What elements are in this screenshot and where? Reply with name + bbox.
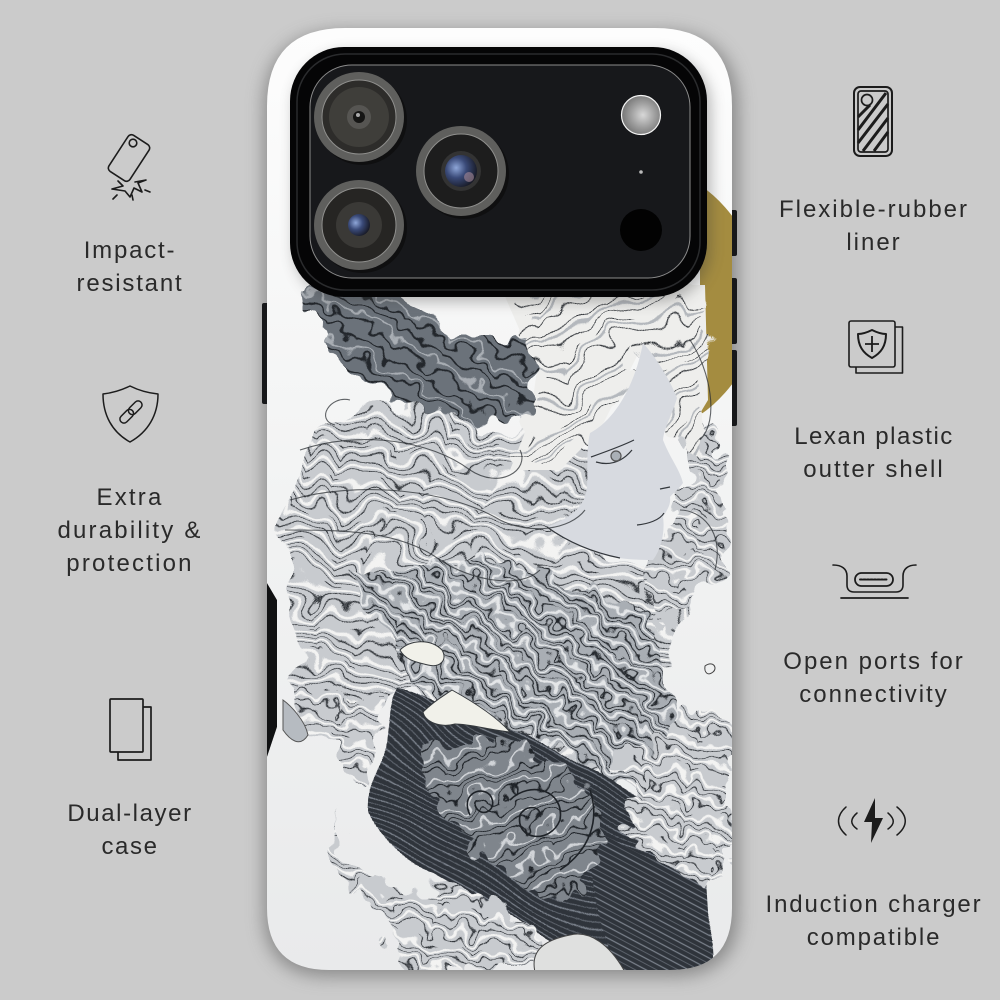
- camera island: [290, 47, 711, 302]
- gold circle: [700, 190, 732, 414]
- label: case: [101, 833, 159, 860]
- lower garland: [330, 810, 560, 970]
- lens: telephoto: [314, 180, 407, 273]
- label: durability &: [57, 517, 203, 544]
- lens: main: [416, 126, 509, 219]
- horn: [305, 285, 537, 421]
- side buttons: [262, 210, 737, 426]
- label: Impact-: [84, 237, 176, 264]
- label: [794, 423, 954, 483]
- microphone dot: [639, 170, 643, 174]
- right flower: [612, 708, 732, 885]
- label: Open ports for: [783, 648, 965, 675]
- icon: shield with link: [102, 385, 159, 443]
- label: outter shell: [803, 456, 945, 483]
- feature: extra durability: [57, 385, 203, 577]
- left garland: [300, 690, 385, 790]
- label: liner: [846, 229, 902, 256]
- left leaf: [283, 700, 308, 742]
- camera plate: [310, 65, 690, 278]
- icon: shield layers: [848, 320, 904, 374]
- label: Dual-layer: [67, 800, 193, 827]
- side cutout: [267, 583, 277, 757]
- face: [547, 343, 683, 560]
- sensor: [620, 209, 662, 251]
- flash: [622, 96, 660, 134]
- swirl linework: [467, 790, 594, 870]
- icon: two layers: [109, 698, 152, 761]
- icon: wireless charging bolt: [838, 798, 906, 843]
- upper hair: [510, 285, 712, 470]
- label: Lexan plastic: [794, 423, 954, 450]
- label: [766, 891, 982, 951]
- lens: ultra wide: [314, 72, 407, 165]
- icon: usb-c port: [832, 564, 917, 599]
- icon: striped liner: [853, 86, 893, 157]
- feature: induction charger: [766, 798, 982, 951]
- denser lower hair: [350, 560, 700, 790]
- feature: open ports: [783, 564, 965, 708]
- label: [77, 237, 183, 297]
- label: [67, 800, 193, 860]
- label: [779, 196, 969, 256]
- feature: lexan plastic shell: [794, 320, 954, 483]
- feature: flexible-rubber liner: [779, 86, 969, 256]
- feature: dual-layer case: [67, 698, 193, 860]
- ornamental swirls: [420, 740, 602, 905]
- label: protection: [66, 550, 194, 577]
- dark body: [378, 695, 712, 970]
- label: Induction charger: [766, 891, 982, 918]
- label: compatible: [807, 924, 941, 951]
- upper hair base: [500, 285, 708, 470]
- facial features: [547, 440, 670, 558]
- case shadow: [264, 32, 738, 976]
- label: [57, 484, 203, 577]
- label: connectivity: [799, 681, 949, 708]
- artwork clipped to case: [283, 185, 760, 975]
- label: Flexible-rubber: [779, 196, 969, 223]
- case body: [267, 28, 732, 970]
- right-side hair: [640, 395, 728, 620]
- loose petal: [705, 664, 715, 674]
- label: [783, 648, 965, 708]
- label: resistant: [77, 270, 183, 297]
- phone case illustration: [254, 22, 748, 986]
- hair strands: [285, 340, 717, 581]
- bottom flower: [534, 934, 625, 972]
- left and lower hair: [288, 404, 690, 790]
- white blossoms: [400, 642, 510, 732]
- dark lower right drape: [590, 830, 712, 975]
- label: Extra: [96, 484, 164, 511]
- icon: phone impact: [108, 134, 151, 201]
- feature: impact-resistant: [77, 134, 183, 297]
